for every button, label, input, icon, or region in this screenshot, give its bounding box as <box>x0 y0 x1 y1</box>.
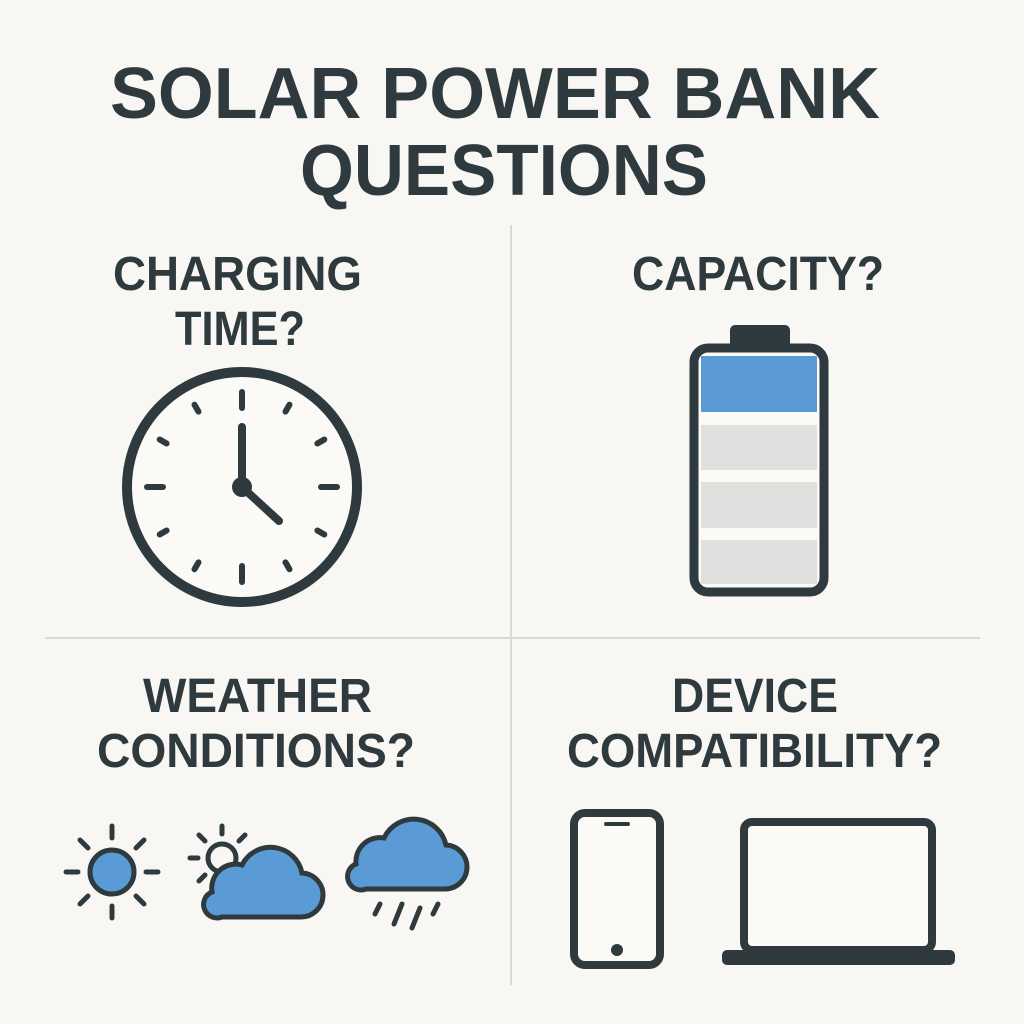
heading: capacity: CAPACITY? <box>632 248 884 301</box>
panel: device compatibility <box>567 670 955 965</box>
icon: sun <box>66 826 158 918</box>
icon: clock <box>127 372 357 602</box>
heading: device compatibility: COMPATIBILITY? <box>567 725 942 778</box>
icon: phone <box>574 813 660 965</box>
panel: capacity <box>632 248 884 592</box>
panel: weather conditions <box>66 670 467 928</box>
heading: weather conditions: WEATHER <box>143 670 372 723</box>
title <box>110 54 880 211</box>
icon: partly cloudy <box>190 826 323 918</box>
heading: weather conditions: CONDITIONS? <box>97 725 415 778</box>
heading: charging time: TIME? <box>175 303 305 356</box>
title: SOLAR POWER BANK <box>110 54 880 134</box>
heading: device compatibility <box>567 670 942 778</box>
panel: charging time <box>113 248 362 602</box>
heading: device compatibility: DEVICE <box>672 670 838 723</box>
heading: charging time <box>113 248 362 356</box>
icon: rain cloud <box>348 819 467 928</box>
icon: battery <box>694 325 824 592</box>
icon: laptop <box>722 822 955 965</box>
title: QUESTIONS <box>300 131 708 211</box>
heading: charging time: CHARGING <box>113 248 362 301</box>
heading: weather conditions <box>97 670 415 778</box>
